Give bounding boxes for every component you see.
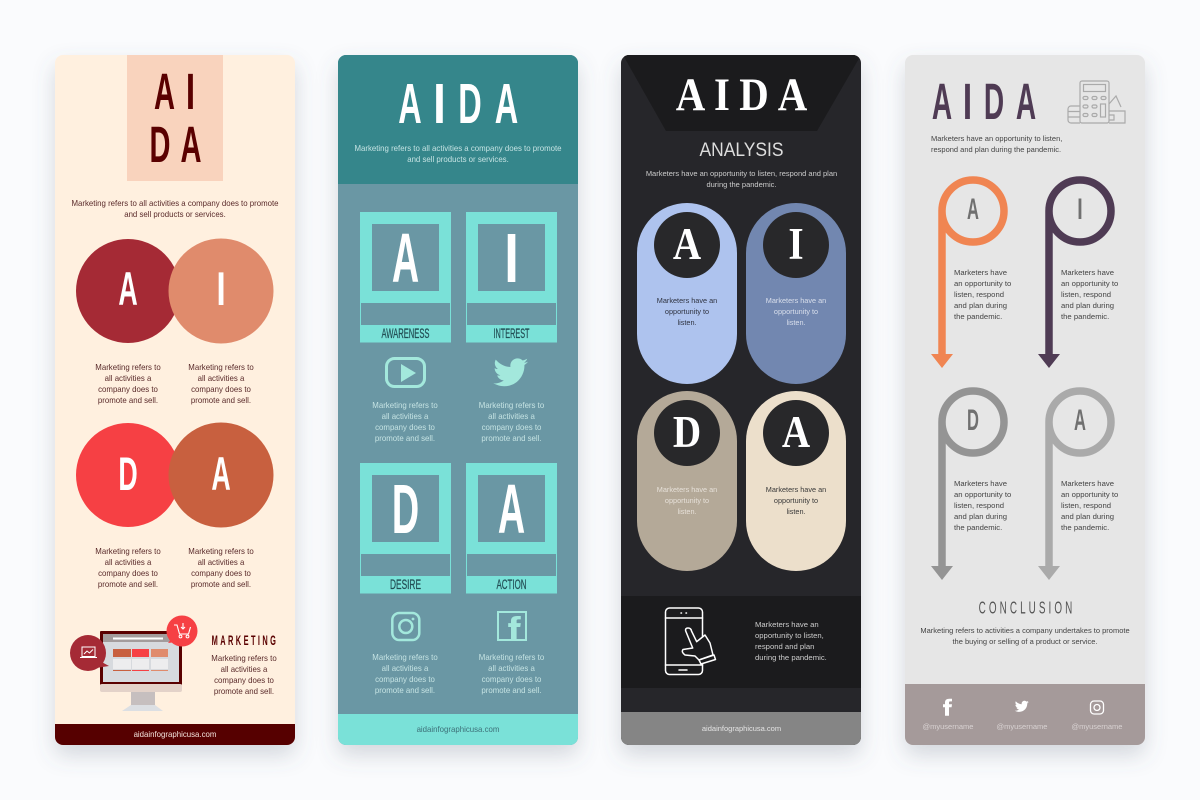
pill: A — [637, 203, 737, 384]
text: D description: listen, respond — [954, 501, 1004, 510]
pill: A: listen. — [677, 318, 697, 327]
pill: D: listen. — [677, 507, 697, 516]
pill: I — [746, 203, 846, 384]
arrow: A — [1038, 391, 1111, 580]
icon: bird — [1015, 701, 1029, 712]
circle: A — [76, 239, 180, 343]
arrow: A: A — [1074, 404, 1086, 437]
text: D description: all activities a — [382, 664, 429, 673]
pill: D — [637, 391, 737, 571]
intro text: Marketers have an opportunity to listen, respond and plan — [646, 169, 837, 178]
text: marketing description: Marketing refers to — [211, 654, 277, 663]
text: A description: all activities a — [488, 664, 535, 673]
footer bar — [621, 712, 861, 745]
card: A action: ACTION — [496, 577, 526, 592]
card: A awareness: AWARENESS — [382, 326, 430, 341]
band: phone callout — [621, 596, 861, 688]
card: D desire: DESIRE — [390, 577, 421, 592]
text: A description: Marketing refers to — [95, 363, 161, 372]
text: A description: an opportunity to — [954, 279, 1011, 288]
icon: f logo — [498, 612, 526, 640]
text: D description: company does to — [375, 675, 435, 684]
circle: A — [168, 422, 274, 528]
text: I description: Marketers have — [1061, 268, 1114, 277]
text: D description: promote and sell. — [98, 580, 158, 589]
title banner: I — [714, 68, 730, 121]
panel: teal AIDA template — [338, 55, 578, 745]
text: marketing description: company does to — [214, 676, 274, 685]
text: D description: company does to — [98, 569, 158, 578]
icon: calculator and money — [1068, 81, 1125, 123]
text: I description: all activities a — [488, 412, 535, 421]
text: A description: promote and sell. — [481, 686, 542, 695]
usernames: @myusername — [997, 722, 1047, 731]
text: I description: company does to — [191, 385, 251, 394]
text: D description: all activities a — [105, 558, 152, 567]
text: A description: the pandemic. — [954, 312, 1002, 321]
text: A description: all activities a — [198, 558, 245, 567]
text: A description: Marketers have — [954, 268, 1007, 277]
text: marketing description: all activities a — [221, 665, 268, 674]
intro text: and sell products or services. — [124, 210, 226, 219]
panel: grey AIDA template — [905, 55, 1145, 745]
text: I description: promote and sell. — [481, 434, 542, 443]
text: D description: promote and sell. — [375, 686, 435, 695]
footer bar — [338, 714, 578, 745]
pill: I: Marketers have an — [766, 296, 826, 305]
text: A description: and plan during — [1061, 512, 1114, 521]
circle: A: A — [211, 448, 231, 501]
title: D — [458, 71, 482, 135]
card: A awareness — [360, 212, 451, 342]
panel: dark AIDA template — [621, 55, 861, 745]
card: D desire — [360, 463, 451, 594]
title: A — [932, 73, 952, 130]
text: A description: company does to — [375, 423, 435, 432]
text: I description: and plan during — [1061, 301, 1114, 310]
pill: A: listen. — [786, 507, 806, 516]
pill: I: listen. — [786, 318, 806, 327]
heading: marketing: MARKETING — [212, 634, 278, 649]
text: A description: all activities a — [105, 374, 152, 383]
title block: A — [154, 62, 175, 120]
title: I — [963, 74, 972, 131]
icon: phone with pointing hand — [666, 608, 716, 674]
intro text: during the pandemic. — [706, 180, 777, 189]
card: D desire: D — [392, 470, 419, 548]
pill: A: Marketers have an — [766, 485, 826, 494]
intro text: Marketers have an opportunity to listen, — [931, 134, 1062, 143]
intro text: Marketing refers to all activities a company does to promote — [71, 199, 279, 208]
heading: analysis: ANALYSIS — [700, 140, 784, 161]
circle: I: I — [216, 262, 226, 315]
pill: I: I — [788, 220, 804, 270]
arrow: I — [1038, 180, 1111, 368]
footer: social links — [905, 684, 1145, 745]
circle: D: D — [118, 448, 138, 501]
title block — [127, 55, 223, 181]
title banner: D — [739, 68, 769, 121]
title banner: A — [676, 68, 705, 121]
conclusion text: Marketing refers to activities a company undertakes to promote — [920, 626, 1130, 635]
text: I description: the pandemic. — [1061, 312, 1109, 321]
icon: f logo — [943, 699, 952, 716]
text: I description: promote and sell. — [191, 396, 251, 405]
card: I interest: I — [504, 220, 519, 298]
usernames: @myusername — [923, 722, 973, 731]
pill: A: Marketers have an — [657, 296, 717, 305]
footer bar: aidainfographicusa.com — [702, 724, 781, 733]
title: A — [495, 71, 518, 135]
icon: camera — [392, 613, 419, 640]
card: A action — [466, 463, 557, 594]
panel: warm red AIDA template — [55, 55, 295, 745]
header band — [338, 55, 578, 184]
arrow: D: D — [967, 404, 979, 437]
circle: D — [76, 423, 180, 527]
pill: I: opportunity to — [774, 307, 818, 316]
title block: D — [150, 115, 170, 173]
heading: conclusion: CONCLUSION — [979, 599, 1075, 618]
text: A description: promote and sell. — [98, 396, 158, 405]
usernames: @myusername — [1072, 722, 1122, 731]
title: A — [1016, 73, 1036, 130]
text: A description: and plan during — [954, 301, 1007, 310]
card: A awareness: A — [392, 219, 419, 297]
text: D description: Marketing refers to — [95, 547, 161, 556]
text: D description: and plan during — [954, 512, 1007, 521]
text: A description: company does to — [482, 675, 542, 684]
text: A description: all activities a — [382, 412, 429, 421]
text: I description: listen, respond — [1061, 290, 1111, 299]
card: A action: A — [498, 470, 525, 548]
pill: D: D — [673, 408, 701, 458]
pill: A: opportunity to — [774, 496, 818, 505]
icon: computer monitor with speech bubbles — [70, 616, 198, 711]
icon: video play — [386, 358, 424, 386]
pill: D: opportunity to — [665, 496, 709, 505]
callout text: respond and plan — [755, 642, 814, 651]
footer bar: aidainfographicusa.com — [417, 725, 500, 734]
conclusion text: the buying or selling of a product or service. — [952, 637, 1098, 646]
title block: I — [186, 64, 195, 121]
intro text: respond and plan during the pandemic. — [931, 145, 1061, 154]
footer bar: aidainfographicusa.com — [134, 730, 217, 739]
pill: A — [746, 391, 846, 571]
text: marketing description: promote and sell. — [214, 687, 274, 696]
arrow: I: I — [1077, 193, 1083, 226]
card: I interest — [466, 212, 557, 342]
title — [932, 73, 1036, 131]
text: A description: Marketing refers to — [479, 653, 545, 662]
title banner: A — [778, 68, 807, 121]
text: A description: the pandemic. — [1061, 523, 1109, 532]
callout text: opportunity to listen, — [755, 631, 824, 640]
callout text: Marketers have an — [755, 620, 819, 629]
text: D description: the pandemic. — [954, 523, 1002, 532]
text: D description: Marketing refers to — [372, 653, 438, 662]
icon: bird — [493, 358, 528, 386]
text: D description: Marketers have — [954, 479, 1007, 488]
intro text: and sell products or services. — [407, 155, 509, 164]
circle: I — [168, 238, 274, 344]
intro text: Marketing refers to all activities a company does to promote — [354, 144, 562, 153]
pill: A: opportunity to — [665, 307, 709, 316]
pill: A: A — [673, 220, 702, 270]
card: I interest: INTEREST — [494, 326, 530, 341]
title: I — [433, 71, 446, 135]
arrow: A — [931, 180, 1004, 368]
text: I description: company does to — [482, 423, 542, 432]
footer bar — [55, 724, 295, 745]
text: I description: Marketing refers to — [479, 401, 545, 410]
text: A description: company does to — [98, 385, 158, 394]
text: A description: Marketing refers to — [188, 547, 254, 556]
text: D description: an opportunity to — [954, 490, 1011, 499]
text: I description: Marketing refers to — [188, 363, 254, 372]
circle: A: A — [118, 263, 138, 316]
icon: camera — [1090, 701, 1104, 714]
text: A description: company does to — [191, 569, 251, 578]
text: A description: listen, respond — [1061, 501, 1111, 510]
title: D — [984, 73, 1004, 130]
title: A — [398, 71, 422, 135]
title block: A — [181, 115, 201, 173]
title banner — [623, 55, 861, 131]
arrow: A: A — [967, 193, 979, 226]
text: I description: an opportunity to — [1061, 279, 1118, 288]
text: A description: promote and sell. — [191, 580, 251, 589]
pill: A: A — [782, 408, 811, 458]
text: A description: Marketing refers to — [372, 401, 438, 410]
text: A description: listen, respond — [954, 290, 1004, 299]
title — [399, 84, 518, 123]
arrow: D — [931, 391, 1004, 580]
text: A description: an opportunity to — [1061, 490, 1118, 499]
callout text: during the pandemic. — [755, 653, 827, 662]
text: I description: all activities a — [198, 374, 245, 383]
text: A description: Marketers have — [1061, 479, 1114, 488]
pill: D: Marketers have an — [657, 485, 717, 494]
text: A description: promote and sell. — [375, 434, 435, 443]
